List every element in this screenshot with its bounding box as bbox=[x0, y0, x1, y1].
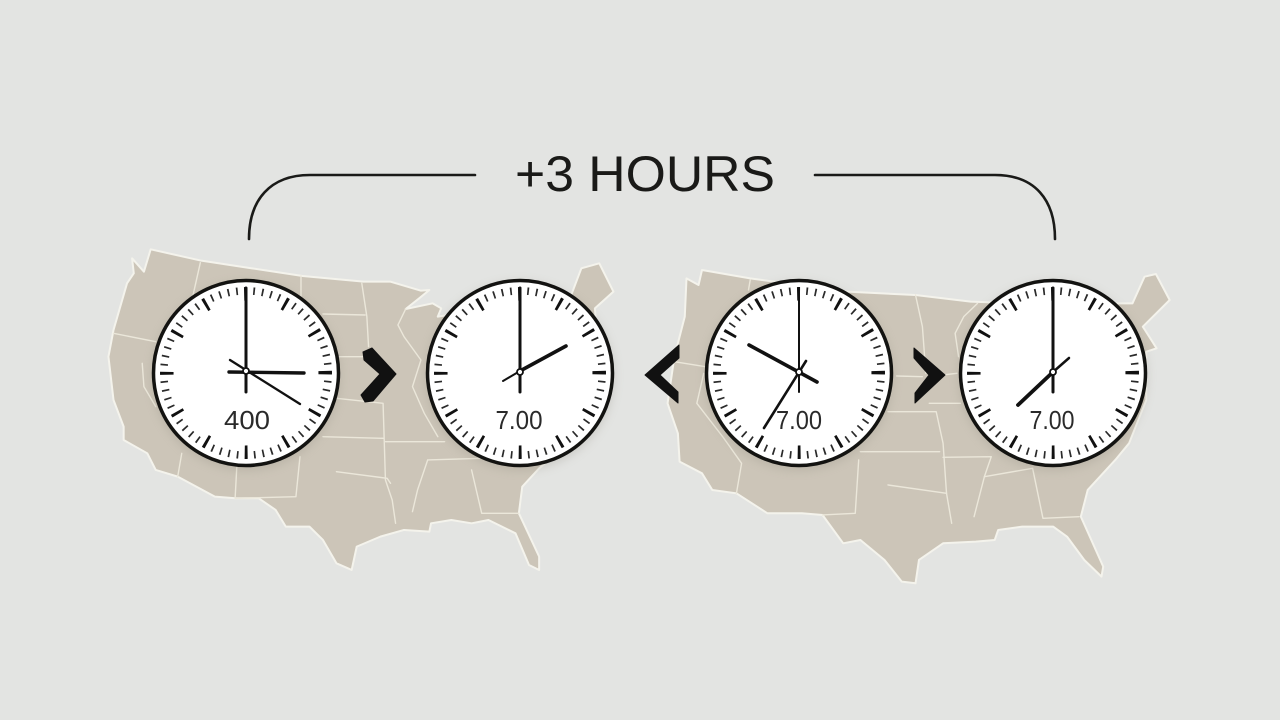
map: left United States bbox=[108, 249, 613, 570]
clock 4 showing 7.00: 7.00 bbox=[1030, 405, 1074, 435]
clock 2 showing 7.00 bbox=[426, 280, 614, 470]
arrow: chevron right between first clocks bbox=[361, 348, 396, 402]
title: +3 hours: +3 HOURS bbox=[515, 146, 775, 202]
arrow: chevron left bbox=[645, 345, 679, 403]
arrow: chevron right between last clocks bbox=[914, 348, 945, 403]
clock 4 showing 7.00 bbox=[959, 280, 1147, 470]
bracket connecting first and last clock bbox=[249, 175, 1055, 239]
map: right United States bbox=[668, 270, 1170, 583]
clock 1 showing 400 bbox=[152, 280, 340, 470]
clock 3 showing 7.00 bbox=[705, 280, 893, 470]
clock 3 showing 7.00: 7.00 bbox=[776, 405, 822, 435]
clock 1 showing 400: 400 bbox=[224, 405, 270, 435]
clock 2 showing 7.00: 7.00 bbox=[496, 405, 542, 435]
